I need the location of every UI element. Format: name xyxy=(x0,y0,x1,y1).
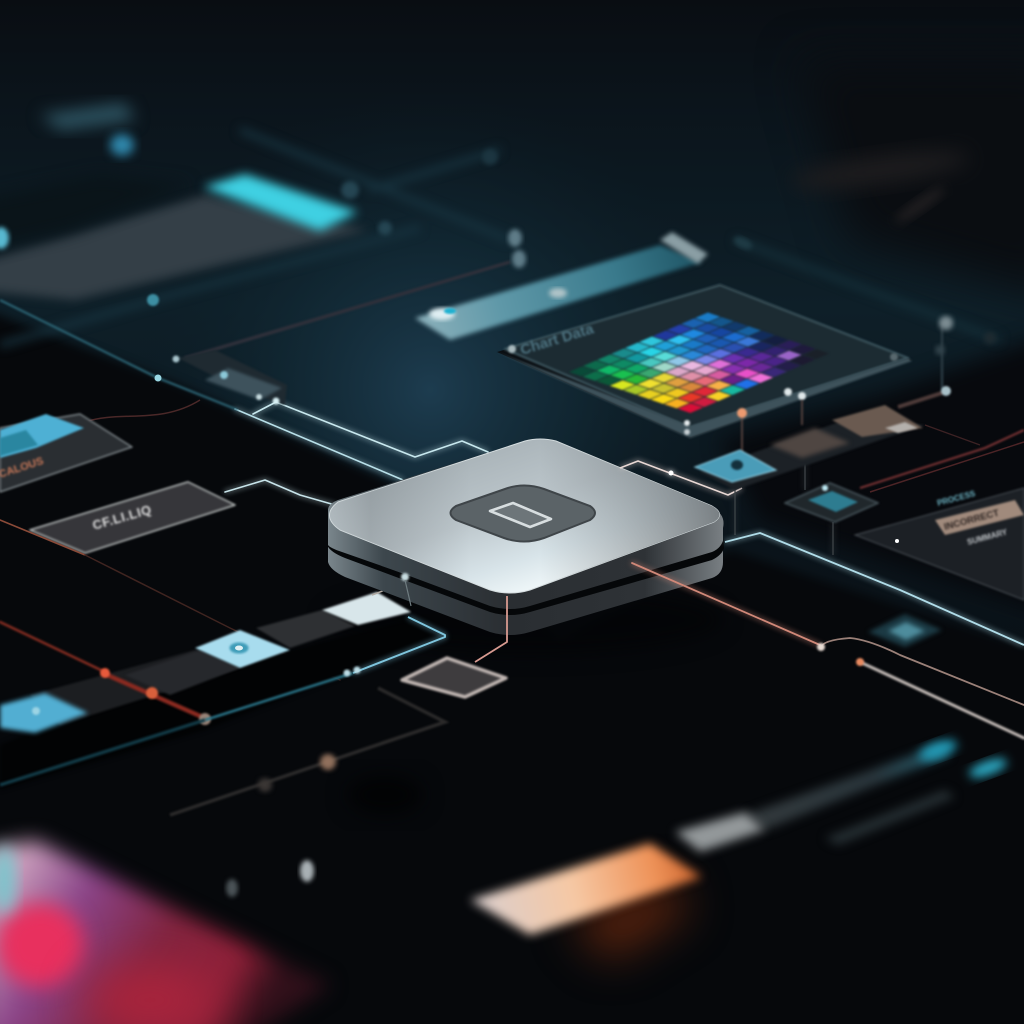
connector: lower dim circuit xyxy=(170,688,445,815)
connector: red segment on band xyxy=(0,622,211,725)
connector: far left teal line xyxy=(0,300,238,422)
text: right card title: PROCESS xyxy=(936,489,977,508)
text: right card tag: INCORRECT xyxy=(943,508,1001,533)
text: right card details: SUMMARY xyxy=(966,527,1009,547)
connector: red lines left xyxy=(0,520,340,680)
panel: left image card xyxy=(0,414,132,492)
panel: thumbnail strip xyxy=(695,405,925,490)
node: blurred teal square xyxy=(868,614,942,647)
icon: recessed square xyxy=(450,486,595,542)
dots: blurred foreground nodes xyxy=(226,775,423,897)
strip: bottom-left segmented band xyxy=(0,592,447,790)
panel: label card xyxy=(30,482,235,553)
connector: chip to right cyan line xyxy=(725,533,1024,645)
dim background connectors top xyxy=(0,130,1000,358)
upright pins and glow under heatmap xyxy=(737,316,996,460)
connector: red lines right xyxy=(860,425,1024,492)
text: label card caption: CF.LI.LIQ xyxy=(91,502,153,533)
connector: cyan line lower left xyxy=(0,585,445,785)
connector: chip bottom red pin xyxy=(401,573,507,662)
panel: right dashboard card xyxy=(855,488,1024,600)
connector: red and white lines lower right xyxy=(632,563,1024,738)
chip: central device xyxy=(327,439,724,635)
panel: blurred top-left dashboard xyxy=(0,103,368,300)
node: small right chip xyxy=(785,483,878,522)
connector: chip to thumbnail strip xyxy=(620,460,833,555)
text: blurred panel heading: Chart Data xyxy=(518,320,596,359)
node: small square xyxy=(402,658,506,697)
panel: blurred orange block xyxy=(470,843,702,960)
connector: upper left cyan lines to chip xyxy=(225,402,488,505)
panel: blurred pink block bottom-left xyxy=(0,840,330,1024)
node: mid-left pill xyxy=(172,350,287,405)
panel: top centre banner xyxy=(415,232,754,340)
chart: colour grid xyxy=(569,312,829,413)
panel: blurred band lower right xyxy=(675,736,1009,852)
panel: heatmap xyxy=(497,284,912,438)
